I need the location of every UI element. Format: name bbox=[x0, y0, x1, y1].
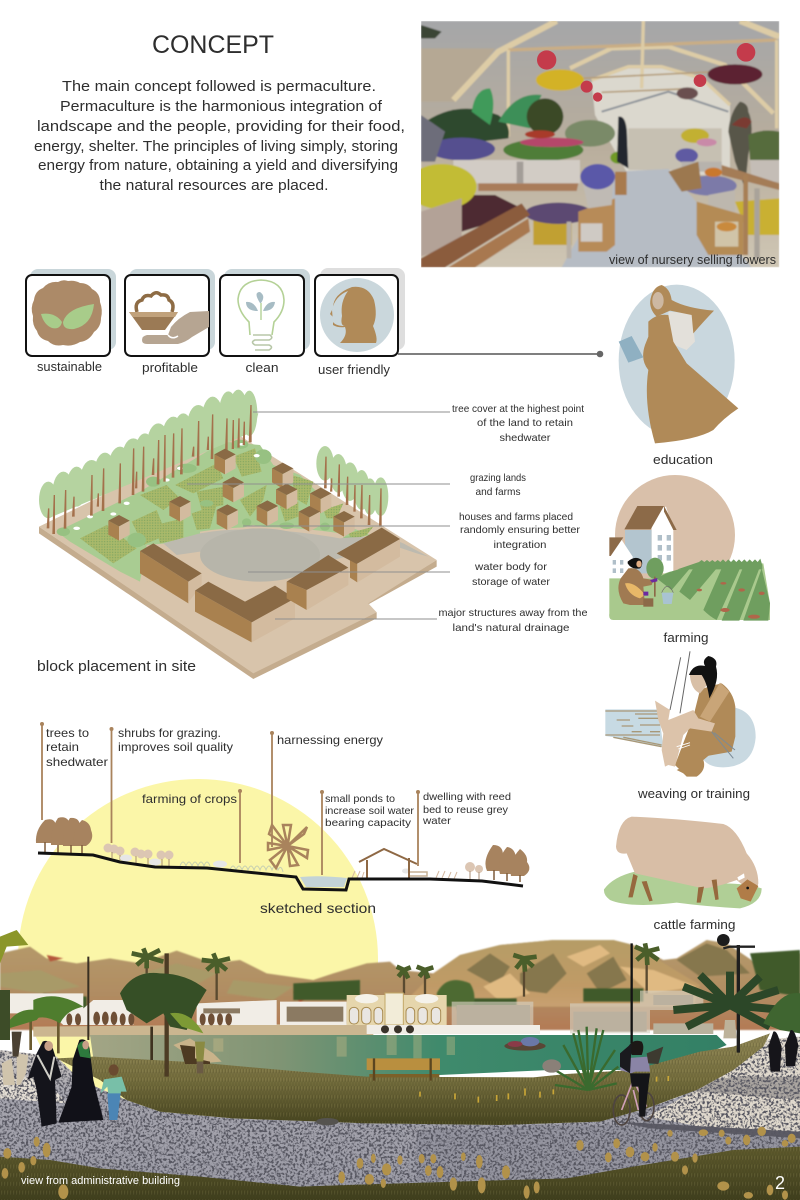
illustration: farming scene bbox=[609, 475, 770, 621]
section annotations: improves soil quality bbox=[118, 740, 233, 754]
site caption: block placement in site bbox=[37, 658, 196, 675]
reed grass mound bbox=[57, 1033, 770, 1125]
photo caption: view of nursery selling flowers bbox=[609, 253, 776, 267]
label: weaving or training: weaving or training bbox=[637, 787, 750, 801]
diagram: sketched section: water bbox=[422, 815, 452, 827]
tall background palms bbox=[132, 943, 659, 1000]
gravel paths bbox=[0, 1037, 800, 1200]
diagram: sketched section: bed to reuse grey bbox=[423, 804, 509, 816]
sand bank bbox=[33, 1023, 373, 1037]
section annotations bbox=[46, 726, 383, 806]
concept paragraph: landscape and the people, providing for their food, bbox=[37, 119, 405, 135]
section pins bbox=[40, 722, 420, 875]
section plants and shrubs bbox=[36, 817, 529, 882]
site annotations: storage of water bbox=[472, 576, 551, 588]
diagram: sketched section: increase soil water bbox=[325, 805, 415, 817]
connector line from user friendly to uses bbox=[398, 351, 603, 357]
distant palms and trees bbox=[43, 950, 800, 1010]
rocks, island and far bench bbox=[173, 1037, 561, 1125]
leader lines bbox=[187, 412, 450, 619]
concept paragraph: energy, shelter. The principles of living simply, storing bbox=[34, 139, 398, 155]
site annotations: major structures away from the bbox=[438, 607, 588, 619]
diagram: sketched section: small ponds to bbox=[325, 793, 395, 805]
spiky plant bbox=[555, 1027, 618, 1090]
ground profile bbox=[38, 853, 523, 890]
bench bbox=[367, 1058, 440, 1081]
big palm bbox=[673, 972, 783, 1027]
illustration: grazing animal bbox=[604, 817, 762, 908]
icon card shadows bbox=[30, 268, 405, 350]
site annotations: of the land to retain bbox=[477, 417, 573, 429]
site annotations: water body for bbox=[474, 561, 548, 573]
section annotations: farming of crops bbox=[142, 792, 237, 806]
icon: sustainable leaves bbox=[26, 275, 110, 356]
icon labels: profitable bbox=[142, 361, 198, 375]
render caption: view from administrative building bbox=[21, 1175, 180, 1187]
wheat heads bbox=[2, 1127, 796, 1200]
illustration: weaving figure bbox=[605, 651, 756, 777]
site annotations: randomly ensuring better bbox=[460, 524, 581, 536]
pond bbox=[300, 876, 347, 887]
section annotations: shedwater bbox=[46, 755, 108, 769]
lanterns bbox=[537, 43, 755, 102]
shore palms and trees bbox=[0, 930, 800, 1060]
site annotations bbox=[438, 403, 588, 634]
site annotations: shedwater bbox=[500, 432, 551, 444]
concept paragraph: the natural resources are placed. bbox=[100, 178, 328, 194]
label: farming: farming bbox=[664, 631, 709, 645]
photo: nursery selling flowers bbox=[407, 21, 779, 267]
icon labels bbox=[37, 360, 391, 377]
site annotations: grazing lands bbox=[470, 472, 526, 484]
site annotations: and farms bbox=[476, 486, 520, 498]
icon: profitable bowl and hand bbox=[125, 275, 209, 356]
concept paragraph bbox=[34, 79, 405, 194]
diagram: block placement in site bbox=[37, 390, 588, 679]
green bushes and crop fields bbox=[57, 440, 373, 582]
icon labels: clean bbox=[246, 361, 279, 375]
site annotations: land's natural drainage bbox=[452, 622, 570, 634]
label: education: education bbox=[653, 453, 713, 467]
concept paragraph: The main concept followed is permaculture. bbox=[62, 79, 376, 95]
site annotations: tree cover at the highest point bbox=[452, 403, 584, 415]
label: cattle farming: cattle farming bbox=[654, 918, 736, 932]
foreground grass bbox=[0, 1147, 800, 1200]
icon: clean light bulb bbox=[220, 275, 304, 356]
section annotations: trees to bbox=[46, 726, 89, 740]
site annotations: integration bbox=[494, 539, 547, 551]
cyclist bbox=[613, 1041, 663, 1125]
diagram: sketched section: dwelling with reed bbox=[423, 791, 511, 803]
concept paragraph: energy from nature, obtaining a yield and diversifying bbox=[38, 158, 398, 174]
icon labels: sustainable bbox=[37, 360, 102, 374]
buildings bbox=[10, 991, 713, 1034]
water body bbox=[163, 528, 428, 582]
title: CONCEPT bbox=[152, 31, 274, 59]
icon labels: user friendly bbox=[318, 363, 391, 377]
houses scattered bbox=[108, 449, 355, 541]
section annotations: retain bbox=[46, 740, 79, 754]
page number: 2 bbox=[775, 1173, 785, 1193]
mountains bbox=[0, 940, 800, 1030]
site annotations: houses and farms placed bbox=[459, 511, 573, 523]
illustration: education figure bbox=[619, 285, 738, 443]
section annotations: harnessing energy bbox=[277, 733, 383, 747]
diagram: sketched section bbox=[36, 722, 529, 916]
diagram: sketched section: bearing capacity bbox=[325, 817, 412, 829]
windmill bbox=[268, 825, 308, 868]
site plate bbox=[39, 432, 437, 679]
panel: four quality icons bbox=[26, 268, 405, 377]
lake bbox=[90, 1035, 727, 1078]
yellow sun circle bbox=[18, 779, 378, 1139]
section annotations: shrubs for grazing. bbox=[118, 726, 221, 740]
section caption: sketched section bbox=[260, 900, 376, 916]
posts and lamps bbox=[88, 943, 755, 1077]
tree line at highest point bbox=[39, 390, 388, 534]
major structures bbox=[140, 528, 400, 642]
photo: view from administrative building bbox=[0, 930, 800, 1200]
concept paragraph: Permaculture is the harmonious integration of bbox=[60, 99, 383, 115]
visitors bbox=[2, 1030, 798, 1127]
dwelling bbox=[359, 849, 427, 878]
icon: user friendly hijab profile bbox=[315, 275, 398, 356]
